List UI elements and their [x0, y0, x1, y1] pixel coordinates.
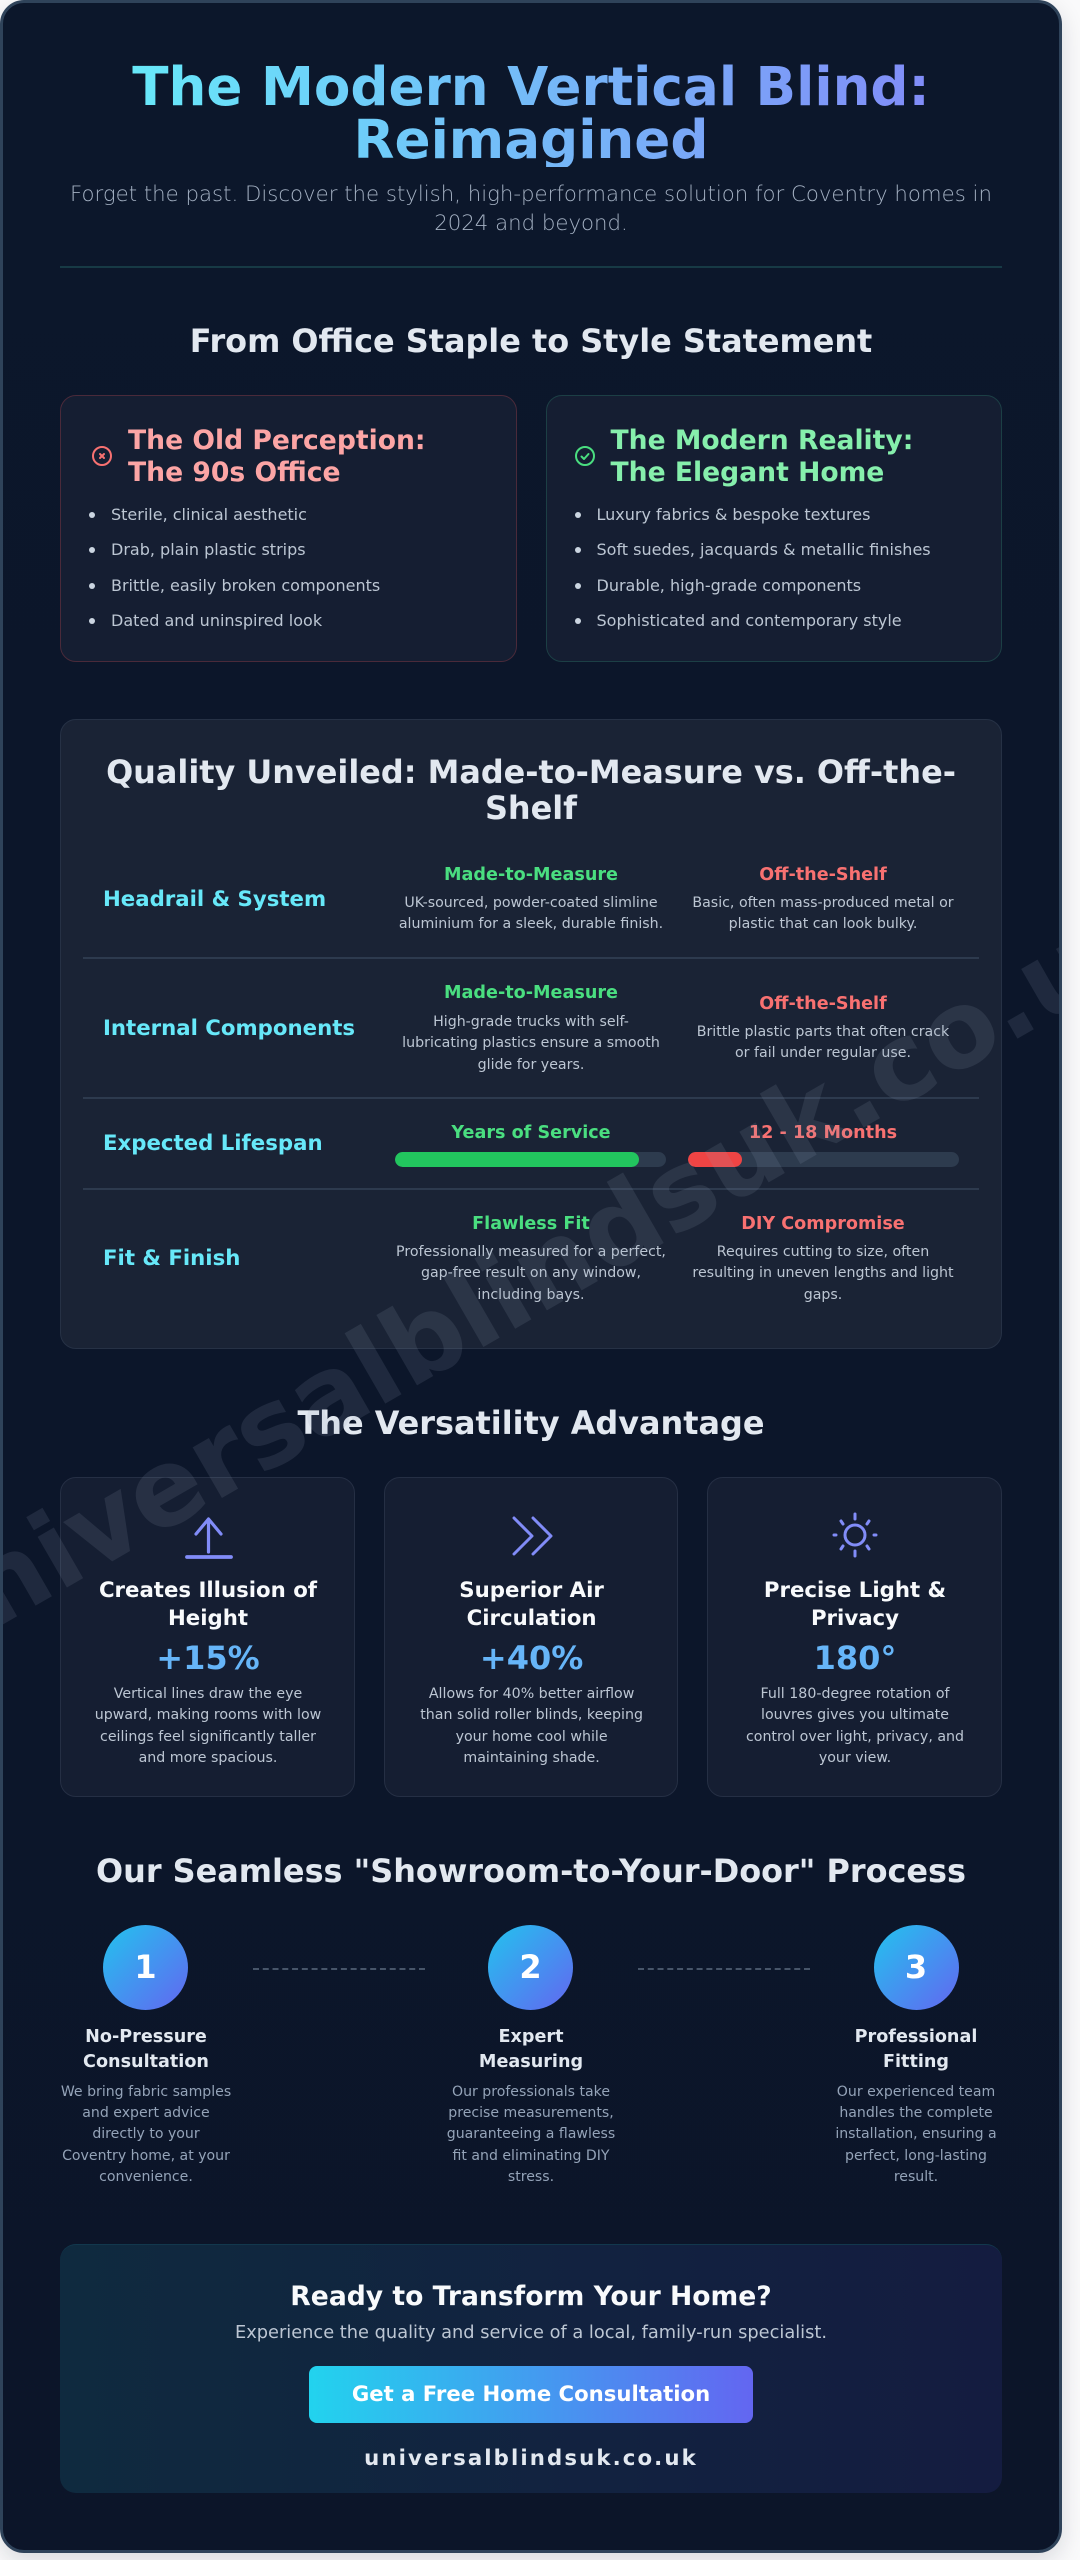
- made-to-measure column: Made-to-Measure: [444, 983, 618, 1003]
- row label: Headrail & System: [103, 887, 326, 912]
- feature description: maintaining shade.: [463, 1750, 600, 1766]
- feature title: [764, 1578, 946, 1631]
- step description: Our professionals take: [452, 2084, 610, 2100]
- off-the-shelf column: plastic that can look bulky.: [729, 916, 917, 932]
- flawless fit column: Professionally measured for a perfect,: [396, 1244, 666, 1260]
- DIY compromise column: DIY Compromise: [741, 1214, 905, 1234]
- feature title: [459, 1578, 604, 1631]
- row: headrail and system: [103, 865, 954, 932]
- step description: Our experienced team: [837, 2084, 995, 2100]
- made-to-measure column: [402, 983, 660, 1073]
- feature description: your home cool while: [456, 1729, 608, 1745]
- old perception heading: [128, 425, 426, 488]
- step 1: [61, 1925, 231, 2185]
- subtitle: Forget the past. Discover the stylish, high-performance solution for Coventry homes in: [70, 182, 992, 207]
- step title: [855, 2027, 977, 2072]
- connector 2: [638, 1968, 810, 1970]
- step description: result.: [894, 2169, 938, 2185]
- made-to-measure column: High-grade trucks with self-: [433, 1014, 629, 1030]
- feature description: upward, making rooms with low: [95, 1707, 321, 1723]
- feature title: Superior Air: [459, 1578, 604, 1603]
- flawless fit column: gap-free result on any window,: [421, 1265, 641, 1281]
- CTA button: Get a Free Home Consultation: [352, 2381, 710, 2406]
- panel: air circulation: [384, 1477, 678, 1797]
- CTA button: [309, 2366, 753, 2423]
- made-to-measure column: [399, 865, 663, 932]
- step title: No-Pressure: [85, 2027, 207, 2047]
- modern reality heading: The Elegant Home: [610, 457, 884, 488]
- heading: quality unveiled: [106, 753, 956, 827]
- feature description: [420, 1686, 643, 1766]
- step description: precise measurements,: [448, 2105, 614, 2121]
- heading: versatility: The Versatility Advantage: [298, 1404, 764, 1442]
- progress bar: years of service: [395, 1152, 666, 1167]
- off-the-shelf column: Off-the-Shelf: [759, 994, 887, 1014]
- lifespan label: made-to-measure: Years of Service: [451, 1123, 611, 1143]
- row label: Fit & Finish: [103, 1246, 240, 1271]
- off-the-shelf column: Basic, often mass-produced metal or: [692, 895, 954, 911]
- DIY compromise column: gaps.: [804, 1287, 842, 1303]
- flawless fit column: including bays.: [477, 1287, 585, 1303]
- row label: Expected Lifespan: [103, 1131, 323, 1156]
- step description: Coventry home, at your: [62, 2148, 230, 2164]
- DIY compromise column: Requires cutting to size, often: [717, 1244, 929, 1260]
- feature title: Creates Illusion of: [99, 1578, 317, 1603]
- step description: directly to your: [92, 2126, 200, 2142]
- connector 1: [253, 1968, 425, 1970]
- DIY compromise column: [692, 1214, 954, 1303]
- icon: arrow up: [185, 1517, 233, 1559]
- made-to-measure column: aluminium for a sleek, durable finish.: [399, 916, 663, 932]
- feature title: [99, 1578, 318, 1631]
- step title: [479, 2027, 583, 2072]
- flawless fit column: Flawless Fit: [472, 1214, 590, 1234]
- step title: Professional: [855, 2027, 977, 2047]
- feature description: louvres gives you ultimate: [761, 1707, 949, 1723]
- modern reality list: Luxury fabrics & bespoke textures: [596, 505, 870, 524]
- DIY compromise column: resulting in uneven lengths and light: [692, 1265, 954, 1281]
- step description: fit and eliminating DIY: [452, 2148, 610, 2164]
- old perception list: Sterile, clinical aesthetic: [111, 505, 307, 524]
- lifespan label: off-the-shelf: 12 - 18 Months: [749, 1123, 897, 1143]
- off-the-shelf column: [697, 994, 950, 1061]
- icon: sun: [832, 1512, 878, 1558]
- step description: guaranteeing a flawless: [447, 2126, 615, 2142]
- panel: call to action: [60, 2244, 1002, 2493]
- number badge: 3: [905, 1948, 927, 1986]
- feature description: Full 180-degree rotation of: [760, 1686, 950, 1702]
- made-to-measure column: Made-to-Measure: [444, 865, 618, 885]
- number badge: 1: [134, 1948, 157, 1986]
- panel: height: [60, 1477, 354, 1797]
- modern reality list: Soft suedes, jacquards & metallic finishes: [596, 540, 931, 559]
- number badge: [103, 1925, 188, 2010]
- modern reality heading: [610, 425, 913, 488]
- header: [70, 56, 992, 236]
- row label: Internal Components: [103, 1016, 355, 1041]
- step description: We bring fabric samples: [61, 2084, 231, 2100]
- heading: process: Our Seamless "Showroom-to-Your-Door" Process: [96, 1852, 966, 1890]
- subtitle: 2024 and beyond.: [434, 210, 628, 236]
- number badge: [488, 1925, 573, 2010]
- feature description: Vertical lines draw the eye: [114, 1686, 302, 1702]
- feature title: Privacy: [811, 1606, 899, 1631]
- old perception list: Brittle, easily broken components: [111, 576, 380, 595]
- icon: cross circle: [92, 446, 112, 466]
- panel: quality comparison: [60, 719, 1002, 1349]
- old perception list: Dated and uninspired look: [111, 611, 322, 630]
- step description: [447, 2084, 615, 2185]
- step description: and expert advice: [82, 2105, 210, 2121]
- modern reality list: Sophisticated and contemporary style: [596, 611, 902, 630]
- title: The Modern Vertical Blind:: [132, 56, 930, 118]
- subtitle: [70, 182, 992, 236]
- step description: handles the complete: [839, 2105, 993, 2121]
- made-to-measure column: lubricating plastics ensure a smooth: [402, 1035, 660, 1051]
- step title: Fitting: [883, 2052, 949, 2072]
- old perception list: Drab, plain plastic strips: [111, 540, 306, 559]
- panel: light and privacy: [707, 1477, 1002, 1797]
- title: Reimagined: [354, 109, 708, 171]
- step title: Measuring: [479, 2052, 583, 2072]
- row: expected lifespan: [103, 1123, 959, 1167]
- feature description: your view.: [819, 1750, 891, 1766]
- number badge: 2: [519, 1948, 542, 1986]
- step description: installation, ensuring a: [835, 2126, 997, 2142]
- website link: universalblindsuk.co.uk: [364, 2446, 698, 2471]
- feature title: Precise Light &: [764, 1578, 946, 1603]
- old perception heading: The Old Perception:: [128, 425, 426, 456]
- feature title: Height: [168, 1606, 248, 1631]
- step 2: [447, 1925, 615, 2185]
- row: internal components: [103, 983, 950, 1073]
- step description: perfect, long-lasting: [845, 2148, 987, 2164]
- stat: +15%: [156, 1639, 260, 1677]
- heading: quality unveiled: Shelf: [485, 789, 577, 827]
- feature description: control over light, privacy, and: [746, 1729, 964, 1745]
- step title: [83, 2027, 209, 2072]
- step description: stress.: [508, 2169, 554, 2185]
- off-the-shelf column: or fail under regular use.: [735, 1045, 911, 1061]
- heading: office staple: From Office Staple to Style Statement: [190, 322, 872, 360]
- panel: modern reality: [546, 395, 1002, 662]
- made-to-measure column: glide for years.: [478, 1057, 584, 1073]
- step title: Expert: [499, 2027, 563, 2047]
- feature description: [95, 1686, 321, 1766]
- step title: Consultation: [83, 2052, 209, 2072]
- CTA heading: Ready to Transform Your Home?: [290, 2281, 772, 2312]
- icon: check circle: [575, 446, 595, 466]
- feature description: Allows for 40% better airflow: [429, 1686, 634, 1702]
- modern reality list: Durable, high-grade components: [596, 576, 861, 595]
- panel: old perception: [60, 395, 516, 662]
- feature description: and more spacious.: [139, 1750, 277, 1766]
- flawless fit column: [396, 1214, 666, 1303]
- number badge: [874, 1925, 958, 2010]
- step description: [61, 2084, 231, 2185]
- off-the-shelf column: Brittle plastic parts that often crack: [697, 1024, 949, 1040]
- step 3: [835, 1925, 997, 2185]
- icon: double chevron: [512, 1516, 553, 1556]
- old perception list: [89, 505, 380, 630]
- modern reality heading: The Modern Reality:: [610, 425, 913, 456]
- step description: [835, 2084, 997, 2185]
- CTA text: Experience the quality and service of a local, family-run specialist.: [235, 2322, 827, 2343]
- progress bar: months: [688, 1152, 959, 1167]
- title: [132, 56, 930, 171]
- modern reality list: [575, 505, 931, 630]
- feature title: Circulation: [467, 1606, 597, 1631]
- feature description: [746, 1686, 964, 1766]
- feature description: ceilings feel significantly taller: [100, 1729, 316, 1745]
- stat: 180°: [814, 1639, 896, 1677]
- off-the-shelf column: [692, 865, 954, 932]
- off-the-shelf column: Off-the-Shelf: [759, 865, 887, 885]
- heading: quality unveiled: Quality Unveiled: Made-to-Measure vs. Off-the-: [106, 753, 956, 791]
- made-to-measure column: UK-sourced, powder-coated slimline: [404, 895, 658, 911]
- row: fit and finish: [103, 1214, 954, 1303]
- feature description: than solid roller blinds, keeping: [420, 1707, 643, 1723]
- old perception heading: The 90s Office: [128, 457, 341, 488]
- stat: +40%: [480, 1639, 583, 1677]
- step description: convenience.: [99, 2169, 193, 2185]
